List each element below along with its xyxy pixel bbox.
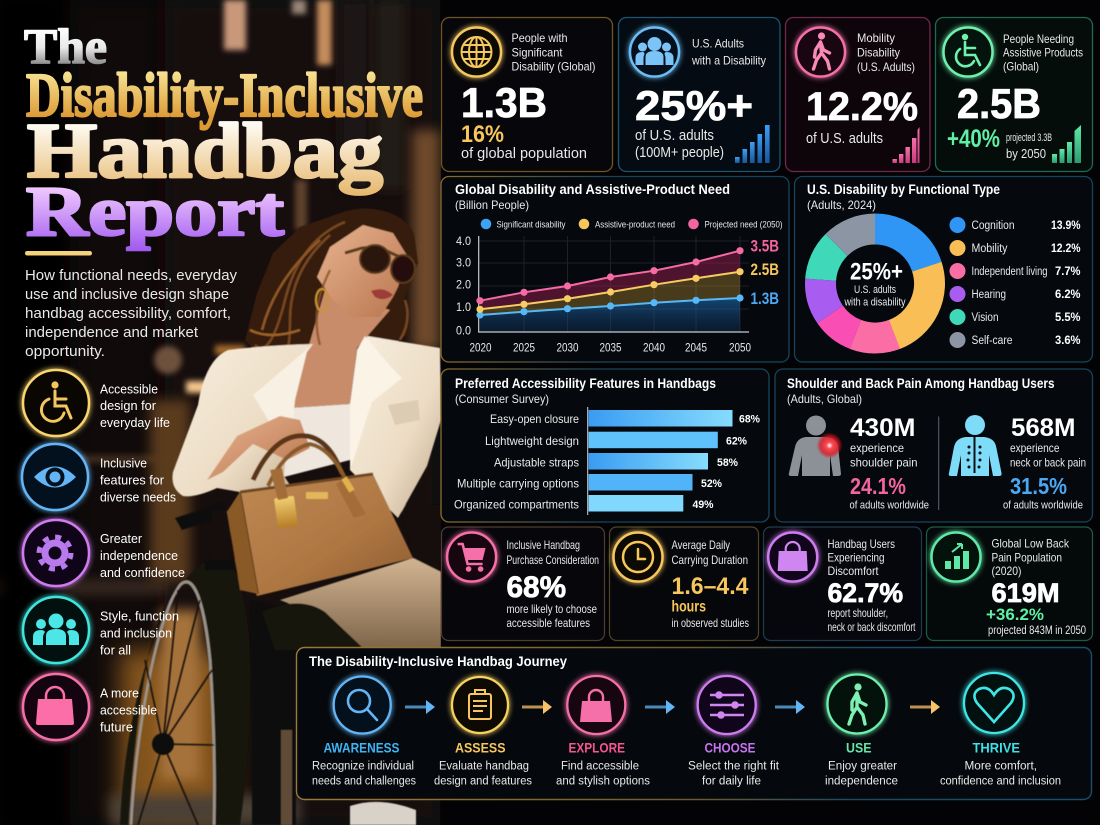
lips and earring	[316, 289, 393, 311]
step: thrive	[940, 673, 1061, 788]
chart: 2035	[600, 340, 622, 354]
step: explore: EXPLORE	[568, 740, 625, 756]
step: use: independence	[825, 776, 898, 788]
stat card: purchase consideration: more likely to choose	[506, 602, 597, 616]
chart: 1.0	[456, 300, 471, 314]
legend: Significant disability	[496, 220, 566, 230]
step: thrive: confidence and inclusion	[940, 776, 1061, 788]
bars	[454, 407, 760, 515]
panel: donut chart	[794, 176, 1092, 362]
benefit: independence: Greater	[100, 531, 143, 546]
chart: 2045	[685, 340, 707, 354]
legend: Projected need (2050)	[704, 220, 782, 230]
stat card: significant disability: Significant	[512, 46, 563, 60]
sunglasses	[345, 245, 416, 283]
chart: 2030	[556, 340, 579, 354]
stat card: purchase consideration: Inclusive Handbag	[506, 538, 580, 552]
stat card: purchase consideration: 68%	[506, 571, 566, 604]
subtitle: independence and market	[25, 324, 199, 341]
panel: line chart: (Billion People)	[455, 198, 529, 212]
stat card: low back pain: +36.2%	[986, 605, 1044, 624]
arrow	[522, 700, 552, 714]
stat card: mobility disability: Mobility	[857, 31, 895, 45]
step: use: USE	[846, 740, 872, 756]
stat card: discomfort: Discomfort	[828, 564, 879, 578]
seat cushion	[262, 604, 365, 650]
wheelchair frame	[175, 503, 441, 825]
stat card: mobility disability: of U.S. adults	[806, 131, 883, 147]
step: explore	[556, 676, 650, 788]
stat card: significant disability: 16%	[461, 121, 504, 148]
donut legend: Mobility	[972, 243, 1008, 255]
bars: Organized compartments	[454, 498, 579, 512]
stat card: significant disability: People with	[512, 31, 568, 45]
title: The	[24, 18, 107, 74]
stat card: carrying duration: hours	[672, 598, 706, 616]
chart	[456, 234, 779, 354]
handbag	[227, 436, 413, 596]
stat card: discomfort: neck or back discomfort	[828, 620, 916, 634]
title: Handbag	[27, 107, 383, 194]
step: assess: design and features	[434, 776, 532, 788]
panel: shoulder and back pain: of adults worldwide	[1003, 500, 1083, 512]
benefit: accessible design: Accessible	[100, 382, 158, 396]
panel: shoulder and back pain: experience	[850, 441, 904, 455]
stat card: assistive products: by 2050	[1006, 147, 1046, 161]
arm and hand	[207, 416, 310, 480]
panel: shoulder and back pain: 24.1%	[850, 473, 906, 499]
hair back	[245, 209, 418, 368]
bars: 49%	[692, 499, 714, 511]
icon: handbag	[768, 532, 817, 582]
stat card: discomfort: Experiencing	[828, 550, 884, 564]
step: explore: and stylish options	[556, 776, 650, 788]
stat card: discomfort: Handbag Users	[828, 537, 895, 551]
step: awareness: needs and challenges	[312, 776, 416, 788]
step: explore: Find accessible	[561, 760, 639, 772]
stat card: US adults with a disability: 25%+	[635, 82, 753, 129]
panel: shoulder and back pain: 568M	[1011, 414, 1076, 442]
benefit: style and function: and inclusion	[100, 626, 172, 640]
stat card: carrying duration: in observed studies	[672, 616, 749, 630]
arrow	[645, 700, 675, 714]
white top	[280, 404, 350, 478]
stat card: carrying duration: Average Daily	[672, 538, 730, 552]
stat card: carrying duration	[610, 527, 758, 640]
panel: shoulder and back pain: 31.5%	[1010, 473, 1067, 499]
stat card: purchase consideration	[442, 527, 604, 640]
panel: bar chart of preferred features	[441, 369, 769, 522]
stat card: US adults with a disability: of U.S. adults	[635, 128, 714, 144]
stat card: mobility disability: 12.2%	[806, 85, 918, 129]
stat card: purchase consideration: Purchase Consideration	[506, 553, 599, 567]
arrow	[910, 700, 940, 714]
chart: 1.3B	[750, 289, 779, 308]
benefit: accessible future	[23, 674, 157, 740]
step: use: Enjoy greater	[828, 760, 897, 772]
panel: shoulder and back pain	[775, 369, 1092, 522]
benefit: accessible design: everyday life	[100, 415, 170, 430]
benefit: accessible future: future	[100, 720, 133, 734]
benefit: inclusive features: Inclusive	[100, 456, 147, 470]
legend: Assistive-product need	[595, 220, 675, 230]
bars: Multiple carrying options	[457, 476, 579, 490]
chart: 0.0	[456, 324, 471, 338]
donut legend: Vision	[972, 312, 998, 324]
arrow	[405, 700, 435, 714]
benefit: independence: independence	[100, 548, 178, 563]
stat card: low back pain: Pain Population	[992, 550, 1062, 564]
donut legend: 3.6%	[1055, 335, 1080, 347]
donut legend: Hearing	[972, 289, 1006, 301]
title: Report	[26, 173, 284, 251]
stat card: carrying duration: Carrying Duration	[672, 553, 748, 567]
subtitle: opportunity.	[25, 343, 105, 360]
chart: 2.0	[456, 278, 471, 292]
panel: bar chart of preferred features: (Consumer Survey)	[455, 392, 549, 406]
benefit: style and function	[23, 597, 179, 663]
legend	[481, 219, 782, 230]
chart: 2040	[643, 340, 665, 354]
stat card: low back pain	[926, 527, 1092, 640]
donut legend: Independent living	[972, 266, 1048, 278]
step: use	[825, 674, 898, 788]
step: choose: for daily life	[702, 776, 761, 788]
step: awareness: Recognize individual	[312, 760, 414, 772]
bars: 52%	[701, 478, 722, 490]
panel: donut chart: (Adults, 2024)	[807, 198, 876, 212]
stat card: mobility disability: (U.S. Adults)	[857, 60, 915, 74]
stat card: discomfort	[764, 527, 922, 640]
bars: Easy-open closure	[490, 412, 579, 426]
bar icon	[735, 125, 770, 163]
stat card: discomfort: 62.7%	[828, 578, 903, 608]
panel: bar chart of preferred features: Preferred Accessibility Features in Handbags	[455, 376, 716, 391]
chart: 4.0	[456, 234, 471, 248]
donut legend: Cognition	[972, 220, 1014, 232]
donut legend: 13.9%	[1051, 220, 1080, 232]
stat card: assistive products: +40%	[947, 125, 1000, 153]
face	[317, 225, 408, 317]
stat card: purchase consideration: accessible features	[506, 616, 590, 630]
panel: shoulder and back pain: experience	[1010, 441, 1060, 455]
hair front strands	[250, 222, 408, 362]
stat card: carrying duration: 1.6–4.4	[672, 573, 749, 600]
step: thrive: More comfort,	[964, 760, 1037, 772]
panel: line chart	[441, 176, 789, 362]
donut centre label: with a disability	[844, 296, 906, 308]
stat card: assistive products	[936, 18, 1092, 172]
panel: shoulder and back pain: Shoulder and Back Pain Among Handbag Users	[787, 376, 1054, 391]
benefit: inclusive features	[22, 444, 176, 510]
chart: 2050	[729, 340, 751, 354]
icon: cart	[447, 532, 496, 582]
step: choose	[688, 676, 780, 788]
icon: shoulder pain figure	[789, 416, 842, 476]
icon: people	[630, 28, 679, 76]
stat card: significant disability	[442, 18, 612, 172]
panel: line chart: Global Disability and Assistive-Product Need	[455, 181, 730, 197]
bars: Adjustable straps	[494, 456, 579, 470]
benefit: inclusive features: diverse needs	[100, 490, 176, 504]
panel: shoulder and back pain: (Adults, Global)	[787, 392, 862, 406]
donut centre label: 25%+	[850, 258, 903, 286]
panel: donut chart: U.S. Disability by Functional Type	[807, 181, 1000, 197]
chart: 3.0	[456, 256, 471, 270]
stat card: low back pain: Global Low Back	[992, 536, 1070, 550]
donut centre label	[844, 258, 906, 308]
donut legend: 6.2%	[1055, 289, 1080, 301]
stat card: US adults with a disability: (100M+ people)	[635, 145, 724, 161]
chart: 2020	[470, 340, 492, 354]
step: assess: Evaluate handbag	[439, 760, 529, 772]
bar icon	[892, 127, 920, 163]
donut centre label: U.S. adults	[854, 284, 896, 296]
stat card: assistive products: (Global)	[1003, 60, 1039, 74]
donut legend	[950, 217, 1080, 348]
icon: globe	[452, 28, 501, 76]
bar icon	[1052, 125, 1081, 163]
donut legend: 7.7%	[1055, 266, 1080, 278]
stat card: significant disability: 1.3B	[461, 79, 547, 126]
stat card: assistive products: People Needing	[1003, 32, 1074, 46]
benefit: independence	[23, 520, 185, 586]
icon: rising chart	[932, 532, 980, 582]
neck	[290, 290, 390, 408]
donut legend: Self-care	[972, 335, 1012, 347]
icon: back pain figure	[949, 415, 1002, 476]
bars: 62%	[726, 436, 747, 448]
donut legend: 12.2%	[1051, 243, 1080, 255]
subtitle	[25, 267, 237, 360]
subtitle: How functional needs, everyday	[25, 267, 237, 284]
bars: 68%	[739, 414, 760, 426]
trousers	[280, 558, 441, 650]
stat card: mobility disability: Disability	[857, 46, 900, 60]
chart: 3.5B	[750, 236, 779, 256]
panel: shoulder and back pain: shoulder pain	[850, 456, 918, 470]
chart: 2025	[513, 340, 535, 354]
benefit: accessible design: design for	[100, 398, 157, 413]
title	[24, 18, 423, 251]
step: awareness: AWARENESS	[324, 740, 400, 756]
stat card: discomfort: report shoulder,	[828, 606, 888, 620]
benefit: accessible design	[23, 370, 170, 436]
benefit: independence: and confidence	[100, 565, 185, 580]
benefit: accessible future: A more	[100, 686, 139, 700]
step: assess	[434, 677, 532, 788]
jacket	[172, 336, 441, 518]
stat card: US adults with a disability: U.S. Adults	[692, 36, 744, 50]
stat card: significant disability: of global population	[461, 145, 587, 162]
panel: shoulder and back pain: 430M	[850, 414, 916, 442]
stat card: significant disability: Disability (Global)	[512, 60, 596, 74]
stat card: assistive products: Assistive Products	[1003, 46, 1083, 60]
bars: Lightweight design	[485, 434, 579, 448]
step: choose: CHOOSE	[704, 740, 756, 756]
arrow	[775, 700, 805, 714]
step: thrive: THRIVE	[972, 740, 1020, 756]
benefit: style and function: Style, function	[100, 608, 179, 624]
bars: 58%	[717, 457, 738, 469]
subtitle: use and inclusive design shape	[25, 286, 229, 303]
step: awareness	[312, 676, 416, 788]
chart: 2.5B	[750, 260, 779, 279]
icon: wheelchair	[944, 28, 992, 76]
benefit: style and function: for all	[100, 642, 131, 658]
panel: shoulder and back pain: of adults worldwide	[850, 500, 929, 512]
stat card: low back pain: (2020)	[992, 564, 1022, 578]
stat card: US adults with a disability	[618, 18, 780, 172]
stat card: assistive products: projected 3.3B	[1006, 132, 1052, 144]
title underline	[25, 251, 92, 256]
icon: clock	[614, 532, 662, 582]
subtitle: handbag accessibility, comfort,	[25, 305, 231, 322]
right-side black backdrop	[441, 0, 1100, 825]
title: Disability-Inclusive	[26, 62, 423, 130]
icon: walker	[796, 28, 845, 76]
panel: journey: The Disability-Inclusive Handbag Journey	[309, 654, 567, 669]
donut legend: 5.5%	[1055, 312, 1080, 324]
panel: journey	[296, 648, 1092, 800]
wheelchair wheel	[120, 557, 250, 825]
step: choose: Select the right fit	[688, 760, 780, 772]
stat card: low back pain: 619M	[992, 578, 1060, 608]
benefit: inclusive features: features for	[100, 472, 165, 488]
stat card: US adults with a disability: with a Disability	[691, 54, 766, 68]
photo: woman in wheelchair with handbag	[120, 209, 441, 825]
stat card: assistive products: 2.5B	[957, 80, 1041, 127]
benefit: accessible future: accessible	[100, 702, 157, 718]
stat card: mobility disability	[786, 18, 930, 172]
step: assess: ASSESS	[455, 740, 506, 756]
donut	[798, 206, 952, 361]
